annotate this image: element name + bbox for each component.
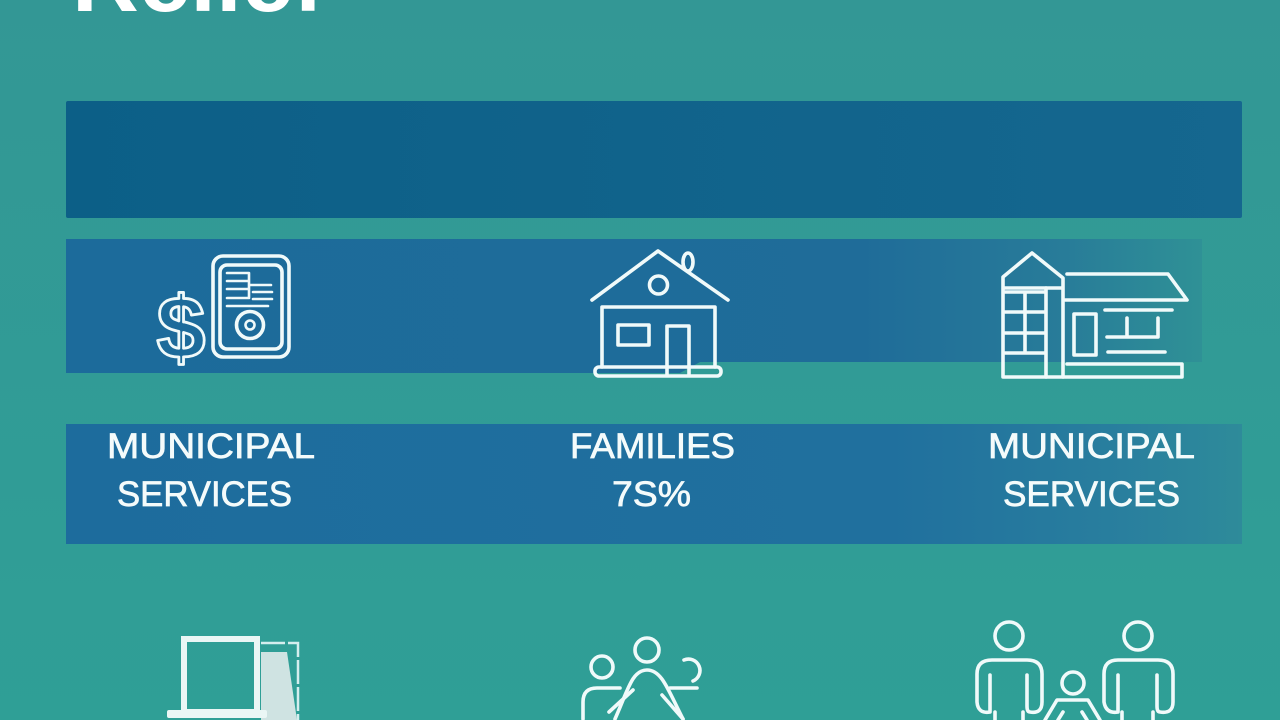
centre body [615,670,683,719]
label line one: MUNICIPAL [107,427,315,466]
left head [591,656,613,678]
right head arc [684,659,700,681]
screen [184,639,257,712]
porch base [595,367,721,376]
left adult head [995,622,1023,650]
panel: icon row band [66,239,1202,373]
side page outline [261,643,298,720]
label line one: MUNICIPAL [988,427,1195,466]
roof [592,251,728,300]
left body [583,688,620,719]
value: 7S% [612,475,691,514]
label line two: SERVICES [117,475,292,514]
dollar sign: $ [157,278,205,377]
label: municipal services right [988,427,1195,514]
window [1074,314,1096,355]
label line one: FAMILIES [570,427,735,466]
window [618,325,649,345]
right adult head [1124,622,1152,650]
wall details [1105,310,1172,352]
document disc centre [246,320,254,330]
tower windows [1005,288,1046,377]
keyboard base [167,710,267,718]
panel: empty header bar [66,101,1242,218]
document text lines [227,273,272,306]
icon: house [592,251,728,376]
door [667,326,689,375]
house body [602,307,715,367]
attic window [650,276,668,294]
icon: family [977,622,1173,720]
document outer frame [213,256,289,357]
tower outline [1003,253,1063,377]
chimney [683,253,693,271]
child body [1045,700,1100,720]
left adult body [977,660,1042,720]
side page [261,652,297,720]
icon: municipal building [1003,253,1187,377]
centre head [635,638,659,662]
roof [1065,274,1187,300]
icon: dollar and document [157,256,289,377]
right adult body [1104,660,1173,720]
label: families [570,427,735,514]
document inner frame [220,265,282,349]
label: municipal services left [107,427,315,514]
base [1063,364,1182,377]
right shoulder [670,686,697,690]
icon: group of people [583,638,700,719]
icon: laptop [167,639,298,720]
label line two: SERVICES [1003,475,1180,514]
panel: label row band [66,424,1242,544]
child head [1062,672,1084,694]
document disc [236,312,264,338]
arms [609,690,683,719]
